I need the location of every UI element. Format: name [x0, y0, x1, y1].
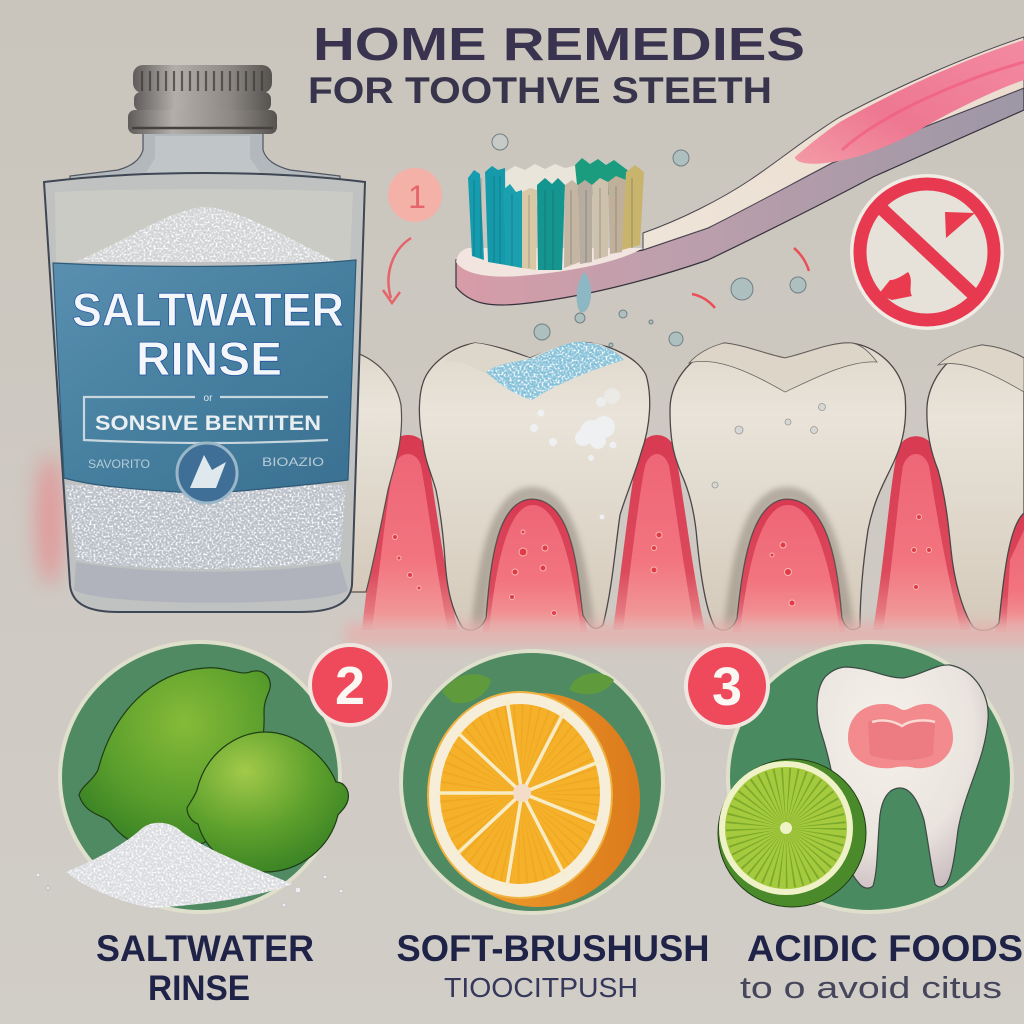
caption: saltwater rinse: RINSE	[148, 969, 250, 1008]
number 1 badge: 1	[408, 179, 426, 215]
title	[308, 18, 805, 111]
label subtitle box: SONSIVE BENTITEN	[95, 412, 321, 435]
caption: acidic foods: ACIDIC FOODS	[747, 928, 1023, 969]
panel: saltwater rinse limes	[36, 642, 348, 912]
number 2 badge	[310, 645, 390, 725]
gums	[362, 435, 1024, 632]
handle pink panel	[795, 40, 1024, 164]
number 3 badge: 3	[712, 657, 742, 717]
tooth 2	[670, 343, 906, 632]
icon: front lime	[187, 732, 348, 872]
pink haze left of bottle	[36, 455, 64, 585]
title: FOR TOOTHVE STEETH	[308, 70, 772, 111]
caption: soft-brush	[396, 928, 710, 1003]
caption: saltwater rinse: SALTWATER	[96, 928, 314, 969]
tooth decay crystals	[486, 342, 624, 400]
handle side	[456, 88, 1024, 305]
bristles	[468, 158, 644, 270]
label subtitle box	[84, 393, 328, 443]
no-acid prohibition sign	[850, 174, 1004, 330]
panel: soft-brush orange	[401, 651, 663, 913]
caption: acidic foods	[740, 928, 1023, 1005]
number 1 badge	[388, 168, 442, 222]
tooth 1	[419, 342, 650, 632]
icon: salt pile	[36, 823, 343, 908]
cap	[128, 65, 277, 134]
water droplets	[492, 134, 809, 347]
label main text	[72, 283, 344, 385]
caption: saltwater rinse	[96, 928, 314, 1008]
red accent marks	[692, 248, 809, 308]
label subtitle box: or	[204, 393, 213, 404]
gums and teeth row	[330, 342, 1024, 646]
salt bottom	[66, 485, 346, 569]
tooth far left	[330, 350, 402, 592]
brush head top	[456, 248, 643, 277]
caption: acidic foods: to o avoid citus	[740, 970, 1002, 1005]
panel: acidic foods	[718, 642, 1012, 912]
curved arrow	[383, 238, 411, 303]
label emblem: SAVORITO	[88, 457, 150, 471]
label emblem: BIOAZIO	[262, 455, 324, 469]
glass base	[74, 562, 348, 603]
label emblem	[88, 443, 324, 503]
number 2 badge: 2	[335, 656, 365, 716]
icon: orange	[428, 692, 640, 907]
label main text: RINSE	[136, 332, 282, 385]
salt mound	[74, 207, 338, 262]
leaves	[442, 673, 614, 703]
blue label	[53, 260, 356, 494]
icon: tooth	[817, 665, 988, 888]
caption: soft-brush: SOFT-BRUSHUSH	[396, 928, 710, 969]
icon: back lime	[79, 668, 270, 852]
neck	[70, 132, 340, 200]
tooth 3	[927, 345, 1024, 630]
icon: lime half	[718, 759, 866, 907]
title: HOME REMEDIES	[313, 18, 805, 70]
handle top	[643, 37, 1024, 250]
bottle with saltwater rinse label	[44, 65, 365, 612]
caption: soft-brush: TIOOCITPUSH	[444, 972, 638, 1003]
gum speckles	[392, 514, 932, 616]
tooth 2 dots	[712, 404, 826, 488]
salt clump	[530, 388, 620, 520]
label main text: SALTWATER	[72, 283, 344, 336]
number 3 badge	[686, 645, 768, 727]
glass body	[44, 173, 365, 612]
toothbrush	[456, 37, 1024, 305]
